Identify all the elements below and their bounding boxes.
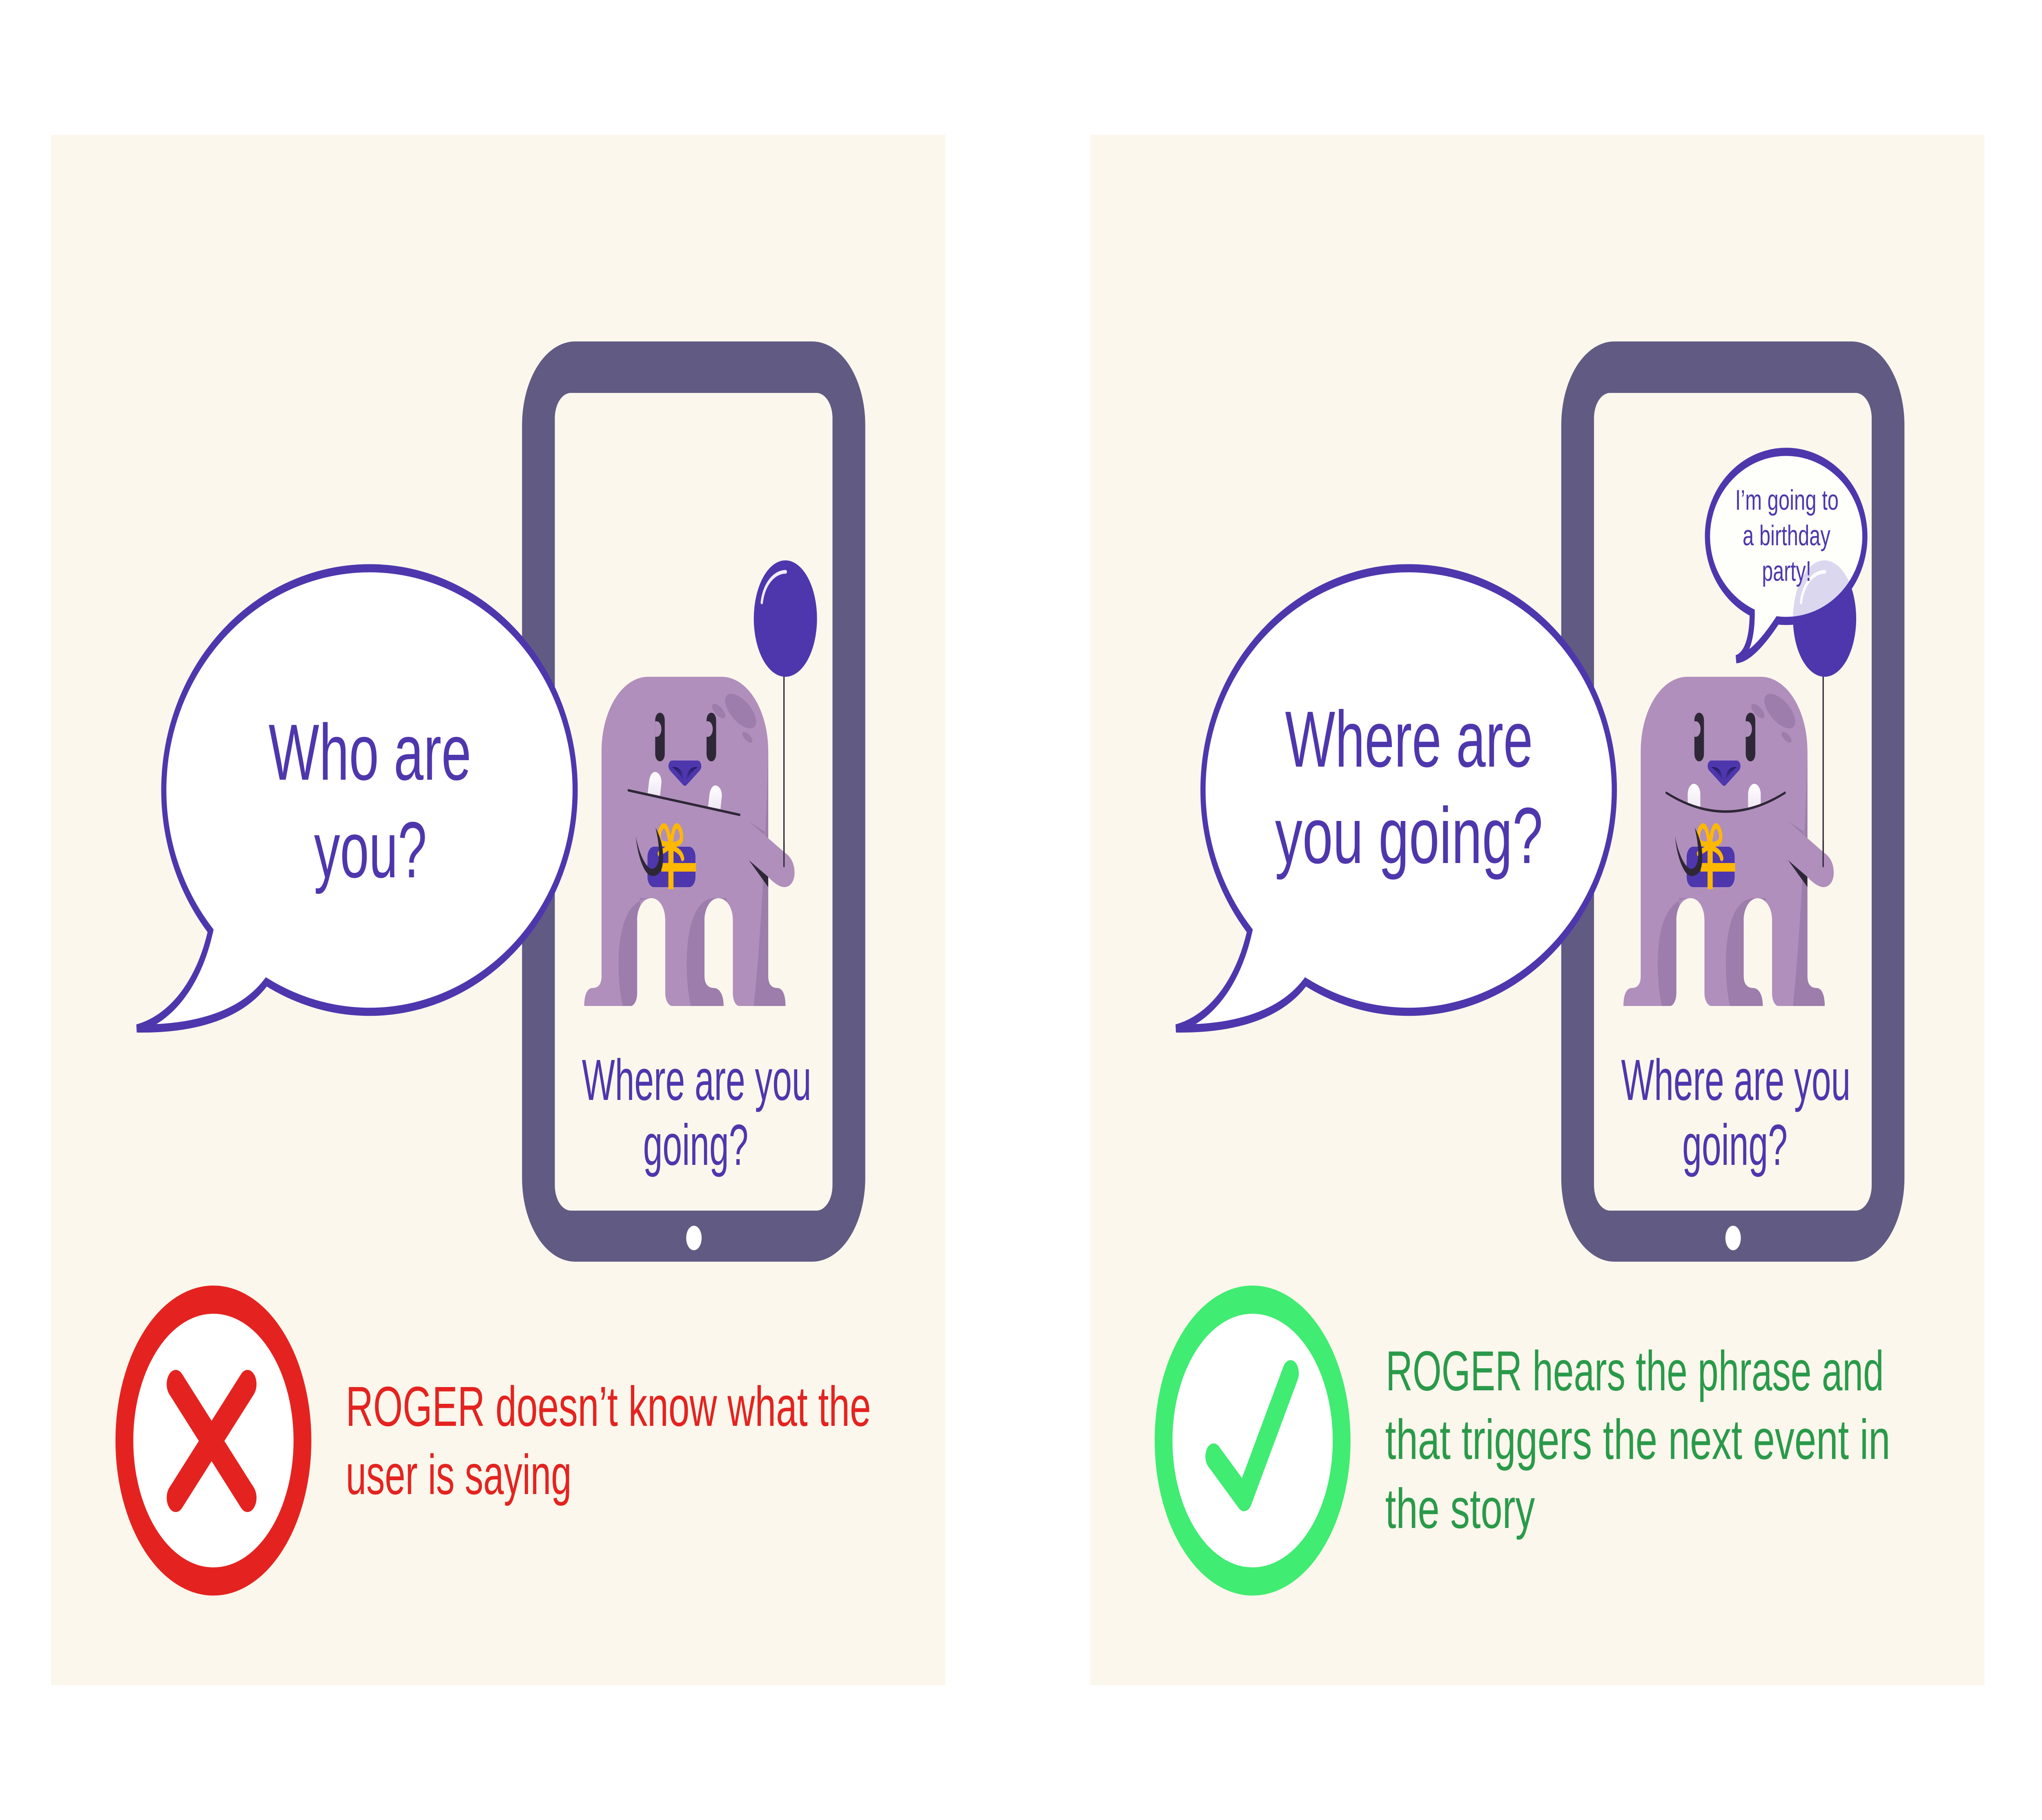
speech bubble: who are you: Who are (269, 707, 471, 797)
small speech bubble: monster's reply: a birthday (1743, 520, 1830, 552)
phone frame (1561, 341, 1904, 1262)
speech bubble: where are you going: Where are (1285, 694, 1533, 784)
green result text: the story (1385, 1478, 1535, 1540)
speech bubble: where are you going: you going? (1275, 791, 1543, 880)
phone screen caption (1621, 1048, 1850, 1178)
speech bubble: who are you: you? (314, 805, 427, 894)
phone frame (522, 341, 865, 1262)
phone screen caption: going? (1682, 1113, 1788, 1178)
small speech bubble: monster's reply: party! (1762, 555, 1811, 587)
red result text: user is saying (346, 1444, 572, 1506)
panel: correct response (1090, 135, 1984, 1685)
red result text (346, 1376, 871, 1506)
red result text: ROGER doesn’t know what the (346, 1376, 871, 1438)
phone screen caption (582, 1048, 811, 1178)
small speech bubble: monster's reply (1708, 452, 1865, 659)
phone screen caption: going? (643, 1113, 748, 1178)
monster character with balloon and gift (1623, 560, 1856, 1006)
green result text: that triggers the next event in (1385, 1409, 1890, 1471)
green result text: ROGER hears the phrase and (1386, 1340, 1884, 1403)
small speech bubble: monster's reply: I’m going to (1735, 484, 1839, 516)
speech bubble: who are you (137, 568, 575, 1028)
monster character with balloon and gift (584, 560, 817, 1006)
icon: red cross in circle (125, 1300, 303, 1581)
panel: wrong response (51, 135, 945, 1685)
phone screen caption: Where are you (1621, 1048, 1850, 1113)
phone screen caption: Where are you (582, 1048, 811, 1113)
speech bubble: where are you going (1176, 568, 1614, 1028)
green result text (1385, 1340, 1890, 1540)
icon: green check in circle (1164, 1300, 1342, 1581)
